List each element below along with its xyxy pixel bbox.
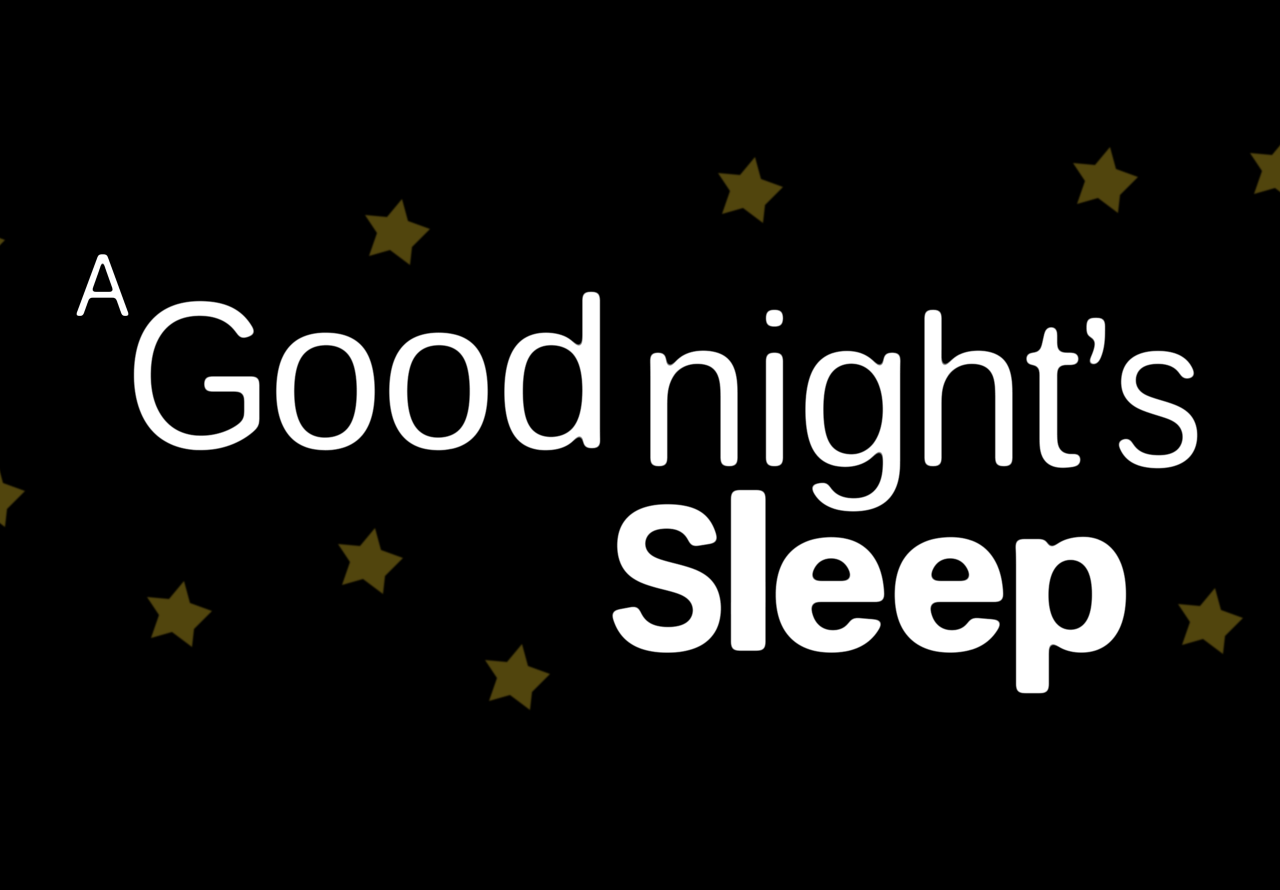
word: night's: n bbox=[635, 271, 752, 514]
title text bbox=[75, 236, 1205, 695]
word: Good: o bbox=[380, 253, 498, 496]
word: Good: o bbox=[266, 253, 384, 496]
word: Sleep: e bbox=[888, 464, 1009, 693]
word: Sleep: l bbox=[717, 453, 780, 695]
word: night's: h bbox=[909, 271, 1027, 514]
word: Sleep: p bbox=[1003, 464, 1133, 693]
word: night's: s bbox=[1111, 271, 1205, 514]
word: Good: G bbox=[123, 257, 275, 495]
word: night's: g bbox=[796, 271, 916, 514]
word: night's: t bbox=[1022, 271, 1083, 514]
word: A: A bbox=[75, 236, 130, 336]
word: Sleep: e bbox=[769, 464, 890, 693]
word: Good: d bbox=[494, 253, 615, 496]
word: night's: ’ bbox=[1072, 271, 1119, 514]
decorative stars bbox=[0, 137, 1280, 710]
word: Sleep: S bbox=[608, 464, 727, 693]
word: night's: i bbox=[751, 271, 798, 514]
